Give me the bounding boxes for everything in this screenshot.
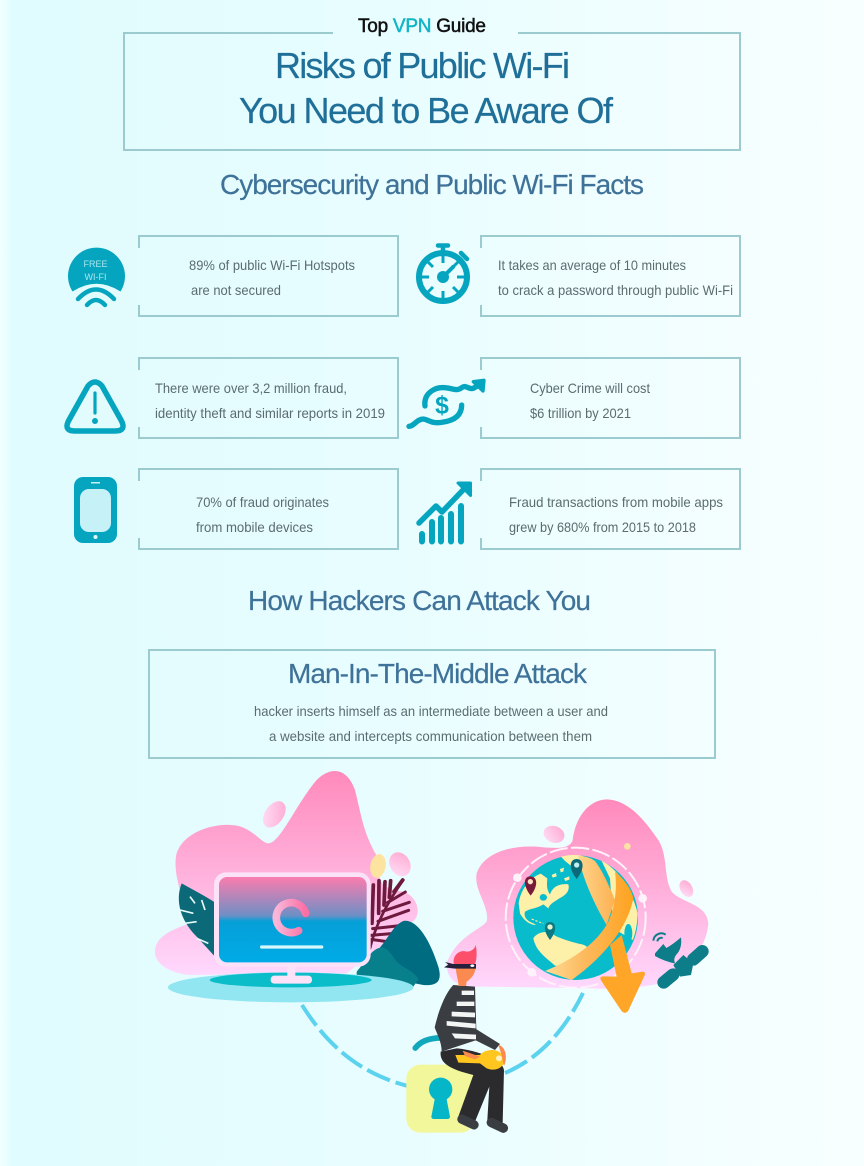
illustration: monitor and base — [168, 872, 413, 1002]
panel: fraud reports fact — [139, 358, 398, 438]
legs and shoes — [441, 1048, 510, 1134]
head and mask — [444, 945, 477, 986]
title — [239, 45, 614, 131]
panel: fraud reports fact: There were over 3,2 million fraud, — [155, 380, 347, 396]
panel: password fact — [481, 236, 740, 316]
panel: man-in-the-middle attack: a website and intercepts communication between them — [269, 728, 592, 744]
panel: password fact: It takes an average of 10 minutes — [498, 257, 686, 273]
tail curve — [415, 1038, 445, 1048]
panel: mobile apps fact: grew by 680% from 2015 to 2018 — [509, 519, 696, 535]
location pins — [525, 859, 583, 940]
monitor — [214, 872, 371, 984]
icon: free wi-fi: WI-FI — [84, 272, 106, 282]
key and hands — [455, 1045, 506, 1070]
illustration: globe — [506, 848, 647, 1013]
panel: mobile apps fact — [481, 469, 740, 549]
ground ellipses — [168, 972, 413, 1002]
icon: growth chart — [419, 483, 470, 542]
illustration: computer scene — [155, 771, 418, 975]
panel: cyber crime fact: $6 trillion by 2021 — [530, 405, 631, 421]
panel: mobile fraud fact: from mobile devices — [196, 519, 313, 535]
illustration: hacker on padlock — [406, 945, 510, 1134]
padlock — [406, 1065, 475, 1133]
striped torso — [435, 985, 500, 1052]
title panel — [124, 33, 740, 150]
dashed connection arc — [302, 993, 583, 1086]
hacker figure — [435, 945, 510, 1134]
header brand: Top VPN Guide: Top VPN Guide — [358, 16, 486, 37]
panel: mobile apps fact: Fraud transactions from mobile apps — [509, 494, 723, 510]
teal mound — [357, 921, 440, 987]
floating drops — [258, 797, 415, 880]
panel: man-in-the-middle attack: Man-In-The-Middle Attack — [288, 658, 588, 689]
illustration: pink blob behind globe — [447, 799, 708, 989]
panel: hotspots fact — [139, 236, 398, 316]
maroon palm — [370, 880, 411, 948]
icon: free wi-fi — [68, 248, 125, 305]
ribbon and arrow — [545, 856, 645, 1013]
illustration: plants beside monitor — [357, 880, 440, 987]
floating drops — [541, 823, 696, 899]
dashed ring — [506, 848, 647, 988]
panel: man-in-the-middle attack: hacker inserts himself as an intermediate between a user and — [254, 703, 608, 719]
title: You Need to Be Aware Of — [239, 90, 614, 131]
panel: mobile fraud fact: 70% of fraud originates — [196, 494, 329, 510]
icon: money flow — [409, 380, 484, 426]
panel: hotspots fact: 89% of public Wi-Fi Hotspots — [189, 257, 355, 273]
panel: man-in-the-middle attack — [149, 650, 715, 758]
panel: password fact: to crack a password through public Wi-Fi — [498, 282, 733, 298]
icon: stopwatch — [419, 246, 467, 301]
title: Risks of Public Wi-Fi — [275, 45, 570, 86]
panel: cyber crime fact — [481, 358, 740, 438]
panel: cyber crime fact: Cyber Crime will cost — [530, 380, 650, 396]
icon: money flow: $ — [435, 393, 449, 420]
panel: hotspots fact: are not secured — [191, 282, 281, 298]
icon: mobile phone — [74, 477, 117, 543]
icon: warning triangle — [67, 382, 123, 431]
panel: fraud reports fact: identity theft and similar reports in 2019 — [155, 405, 385, 421]
panel: mobile fraud fact — [139, 469, 398, 549]
icon: satellite — [653, 933, 702, 982]
pink blob — [155, 771, 418, 975]
icon: free wi-fi: FREE — [83, 259, 108, 269]
heading: facts: Cybersecurity and Public Wi-Fi Facts — [220, 169, 644, 200]
teal leaf — [179, 883, 222, 957]
globe body and continents — [513, 855, 638, 980]
heading: attacks: How Hackers Can Attack You — [248, 585, 591, 616]
